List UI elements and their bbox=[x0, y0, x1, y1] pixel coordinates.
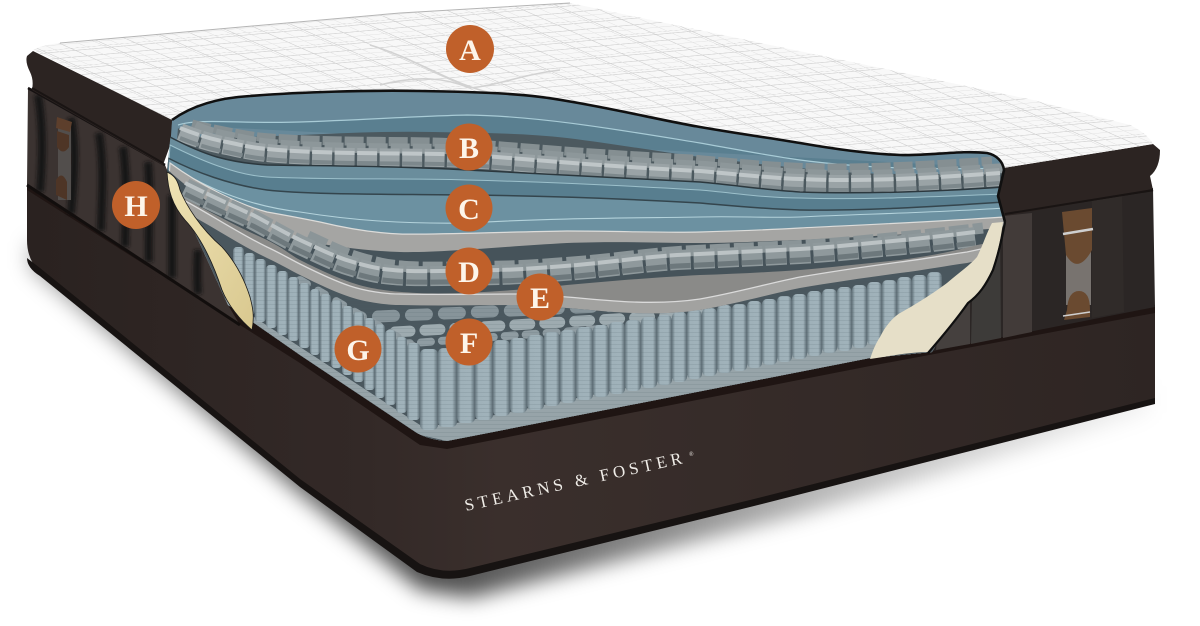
brand name: Stearns & Foster: ® bbox=[689, 451, 694, 458]
coil columns: front side bbox=[438, 272, 942, 427]
layer: lower micro coil row bbox=[168, 170, 989, 294]
cutaway outline bbox=[172, 91, 1005, 222]
layer: right cream edge support bbox=[870, 222, 1005, 359]
badge G: G bbox=[346, 334, 370, 367]
panel: left mattress side with stripes bbox=[27, 88, 240, 325]
panel: right mattress side with stripes bbox=[928, 188, 1155, 352]
layer: lower blue foam bbox=[167, 157, 1003, 234]
badge G bbox=[334, 326, 382, 372]
badge H: H bbox=[124, 190, 148, 223]
icon: left handle strap bbox=[56, 117, 72, 200]
panel: pillow-top side bands bbox=[26, 51, 1160, 216]
layer: top blue foam bbox=[170, 92, 1003, 174]
foundation base bbox=[27, 183, 1155, 579]
badge C: C bbox=[458, 193, 480, 226]
layer: middle blue foam bbox=[150, 136, 1010, 460]
badge H bbox=[112, 181, 160, 229]
badge C bbox=[446, 184, 492, 232]
layer: pocketed coil unit bbox=[195, 218, 972, 441]
layer: upper micro coil row bbox=[177, 120, 1002, 192]
badge B: B bbox=[459, 132, 479, 165]
coil pad bbox=[225, 298, 885, 441]
badge A bbox=[446, 25, 494, 73]
badge A: A bbox=[459, 34, 481, 67]
layer: left cream edge support bbox=[167, 172, 253, 330]
badge F: F bbox=[460, 327, 478, 360]
coil columns: left side bbox=[233, 247, 942, 440]
badge E bbox=[516, 274, 564, 320]
icon: right handle strap bbox=[1062, 208, 1093, 320]
badge B bbox=[446, 124, 492, 170]
layer: gray comfort foam bbox=[168, 162, 1004, 354]
floor shadow bbox=[30, 240, 1150, 598]
badge D bbox=[446, 248, 492, 294]
layer: gray base foam bbox=[184, 198, 983, 441]
badge E: E bbox=[530, 282, 550, 315]
brand name: Stearns & Foster: STEARNS & FOSTER bbox=[463, 449, 684, 515]
badge D: D bbox=[458, 256, 480, 289]
panel: white quilted top cover bbox=[33, 3, 1153, 168]
coil top surface bbox=[300, 280, 700, 350]
panel: cutaway interior layers bbox=[150, 91, 1010, 460]
badge F bbox=[446, 318, 492, 366]
